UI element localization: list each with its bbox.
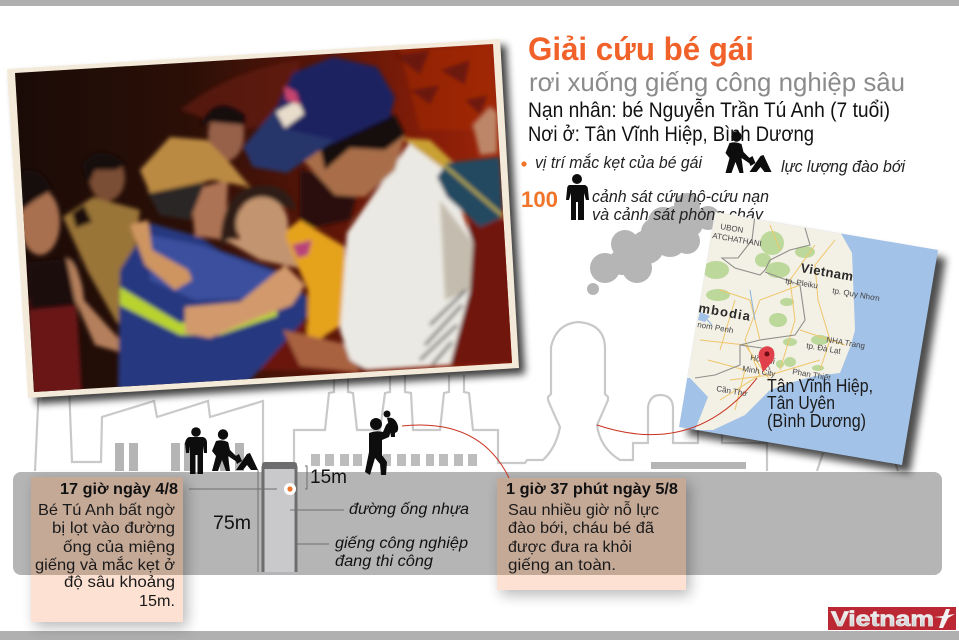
callout: 17h on 4/8: bị lọt vào đường <box>52 520 175 537</box>
map pin <box>758 346 774 372</box>
legend: police forces: và cảnh sát phòng cháy <box>592 205 764 224</box>
tan cap <box>140 137 250 193</box>
stuck position marker <box>284 483 296 495</box>
man behind <box>208 109 244 161</box>
map location label: Tân Uyên <box>767 393 835 413</box>
label: industrial well under construction <box>335 535 468 570</box>
helmet and hand on the right <box>473 107 497 155</box>
factory silhouette background <box>35 322 898 471</box>
depth label 75m: 75m <box>213 513 251 534</box>
blue uniform <box>118 223 307 390</box>
callout: 17h on 4/8: Bé Tú Anh bất ngờ <box>38 502 176 519</box>
Vietnam+ logo: Vietnam <box>831 608 934 631</box>
map of southern Vietnam: tp. Quy Nhơn <box>832 286 880 303</box>
callout: 17h on 4/8: 15m. <box>139 593 175 610</box>
map of southern Vietnam: tp. Pleiku <box>785 276 819 291</box>
callout: 1h37 on 5/8: Sau nhiều giờ nỗ lực <box>508 500 659 519</box>
smoke cloud <box>587 193 720 295</box>
label: industrial well under construction: giếng công nghiệp <box>335 535 468 552</box>
map of southern Vietnam: UBON <box>720 222 744 235</box>
callout: 1h37 on 5/8: đào bới, cháu bé đã <box>508 520 654 537</box>
map location label: Tân Vĩnh Hiệp, <box>767 376 873 396</box>
Vietnam+ logo <box>828 607 956 631</box>
legend icon: police person <box>566 174 589 220</box>
label: industrial well under construction: đang thi công <box>335 553 433 570</box>
grey ground band <box>13 472 942 575</box>
red connector: rescue figure to callout <box>402 425 509 478</box>
leader lines <box>189 466 344 544</box>
top bar <box>0 0 959 6</box>
map of southern Vietnam: ATCHATHANI <box>712 231 762 248</box>
towel <box>283 220 345 347</box>
blue cap <box>277 57 395 150</box>
map location label <box>767 376 873 431</box>
title: Giải cứu bé gái <box>528 31 754 67</box>
map of southern Vietnam: Phan Thiết <box>792 367 832 383</box>
uniform man's head <box>190 180 228 240</box>
callout: 1h37 on 5/8: giếng an toàn. <box>508 557 616 574</box>
callout: 1h37 on 5/8: được đưa ra khỏi <box>508 539 632 556</box>
map of southern Vietnam: Minh City <box>742 364 776 379</box>
75m dimension line <box>257 470 259 572</box>
callout: 17h on 4/8: 17 giờ ngày 4/8 <box>60 481 178 498</box>
subtitle: rơi xuống giếng công nghiệp sâu <box>529 67 905 97</box>
legend: 100 count: 100 <box>521 187 558 212</box>
callout: 17h on 4/8: độ sâu khoảng <box>64 574 175 591</box>
map of southern Vietnam: Hồ Chí <box>750 353 776 366</box>
victim name: Nạn nhân: bé Nguyễn Trần Tú Anh (7 tuổi) <box>528 99 890 122</box>
callout: 17h on 4/8: ống của miệng <box>63 539 175 556</box>
icon: two rescuers <box>185 427 258 474</box>
girl <box>220 186 296 245</box>
icon: rescuer carrying the child <box>365 410 398 475</box>
map of southern Vietnam <box>670 205 946 473</box>
legend: stuck position: vị trí mắc kẹt của bé gái <box>535 153 703 172</box>
map of southern Vietnam: NHA Trang <box>826 335 866 351</box>
map of southern Vietnam: Cần Thơ <box>716 384 749 398</box>
red connector: factory to map <box>597 378 757 435</box>
label: plastic pipe: đường ống nhựa <box>349 501 469 518</box>
legend: digging force: lực lượng đào bới <box>781 157 906 176</box>
left man <box>28 295 82 395</box>
map of southern Vietnam: mbodia <box>697 300 752 324</box>
photo: rescuers holding the girl <box>7 39 525 404</box>
callout: 17h on 4/8: giếng và mắc kẹt ở <box>35 555 176 574</box>
legend: police forces: cảnh sát cứu hộ-cứu nạn <box>592 187 769 206</box>
depth label 15m: 15m <box>310 467 347 488</box>
map of southern Vietnam: Vietnam <box>799 260 854 284</box>
legend icon: digging worker <box>726 131 772 173</box>
man in gold shirt <box>63 197 140 325</box>
place of residence: Nơi ở: Tân Vĩnh Hiệp, Bình Dương <box>528 123 814 146</box>
rescuer arms <box>130 220 192 290</box>
well diagram <box>189 462 344 572</box>
callout: 17h on 4/8 <box>31 477 187 627</box>
callout: 1h37 on 5/8: 1 giờ 37 phút ngày 5/8 <box>506 481 678 498</box>
callout: 1h37 on 5/8 <box>497 478 690 595</box>
bottom bar <box>0 631 959 640</box>
map of southern Vietnam: tp. Đà Lạt <box>806 341 842 356</box>
map location label: (Bình Dương) <box>767 411 866 431</box>
white shirt man <box>283 330 360 373</box>
legend: police forces <box>592 187 769 224</box>
map of southern Vietnam: nom Penh <box>697 320 734 335</box>
